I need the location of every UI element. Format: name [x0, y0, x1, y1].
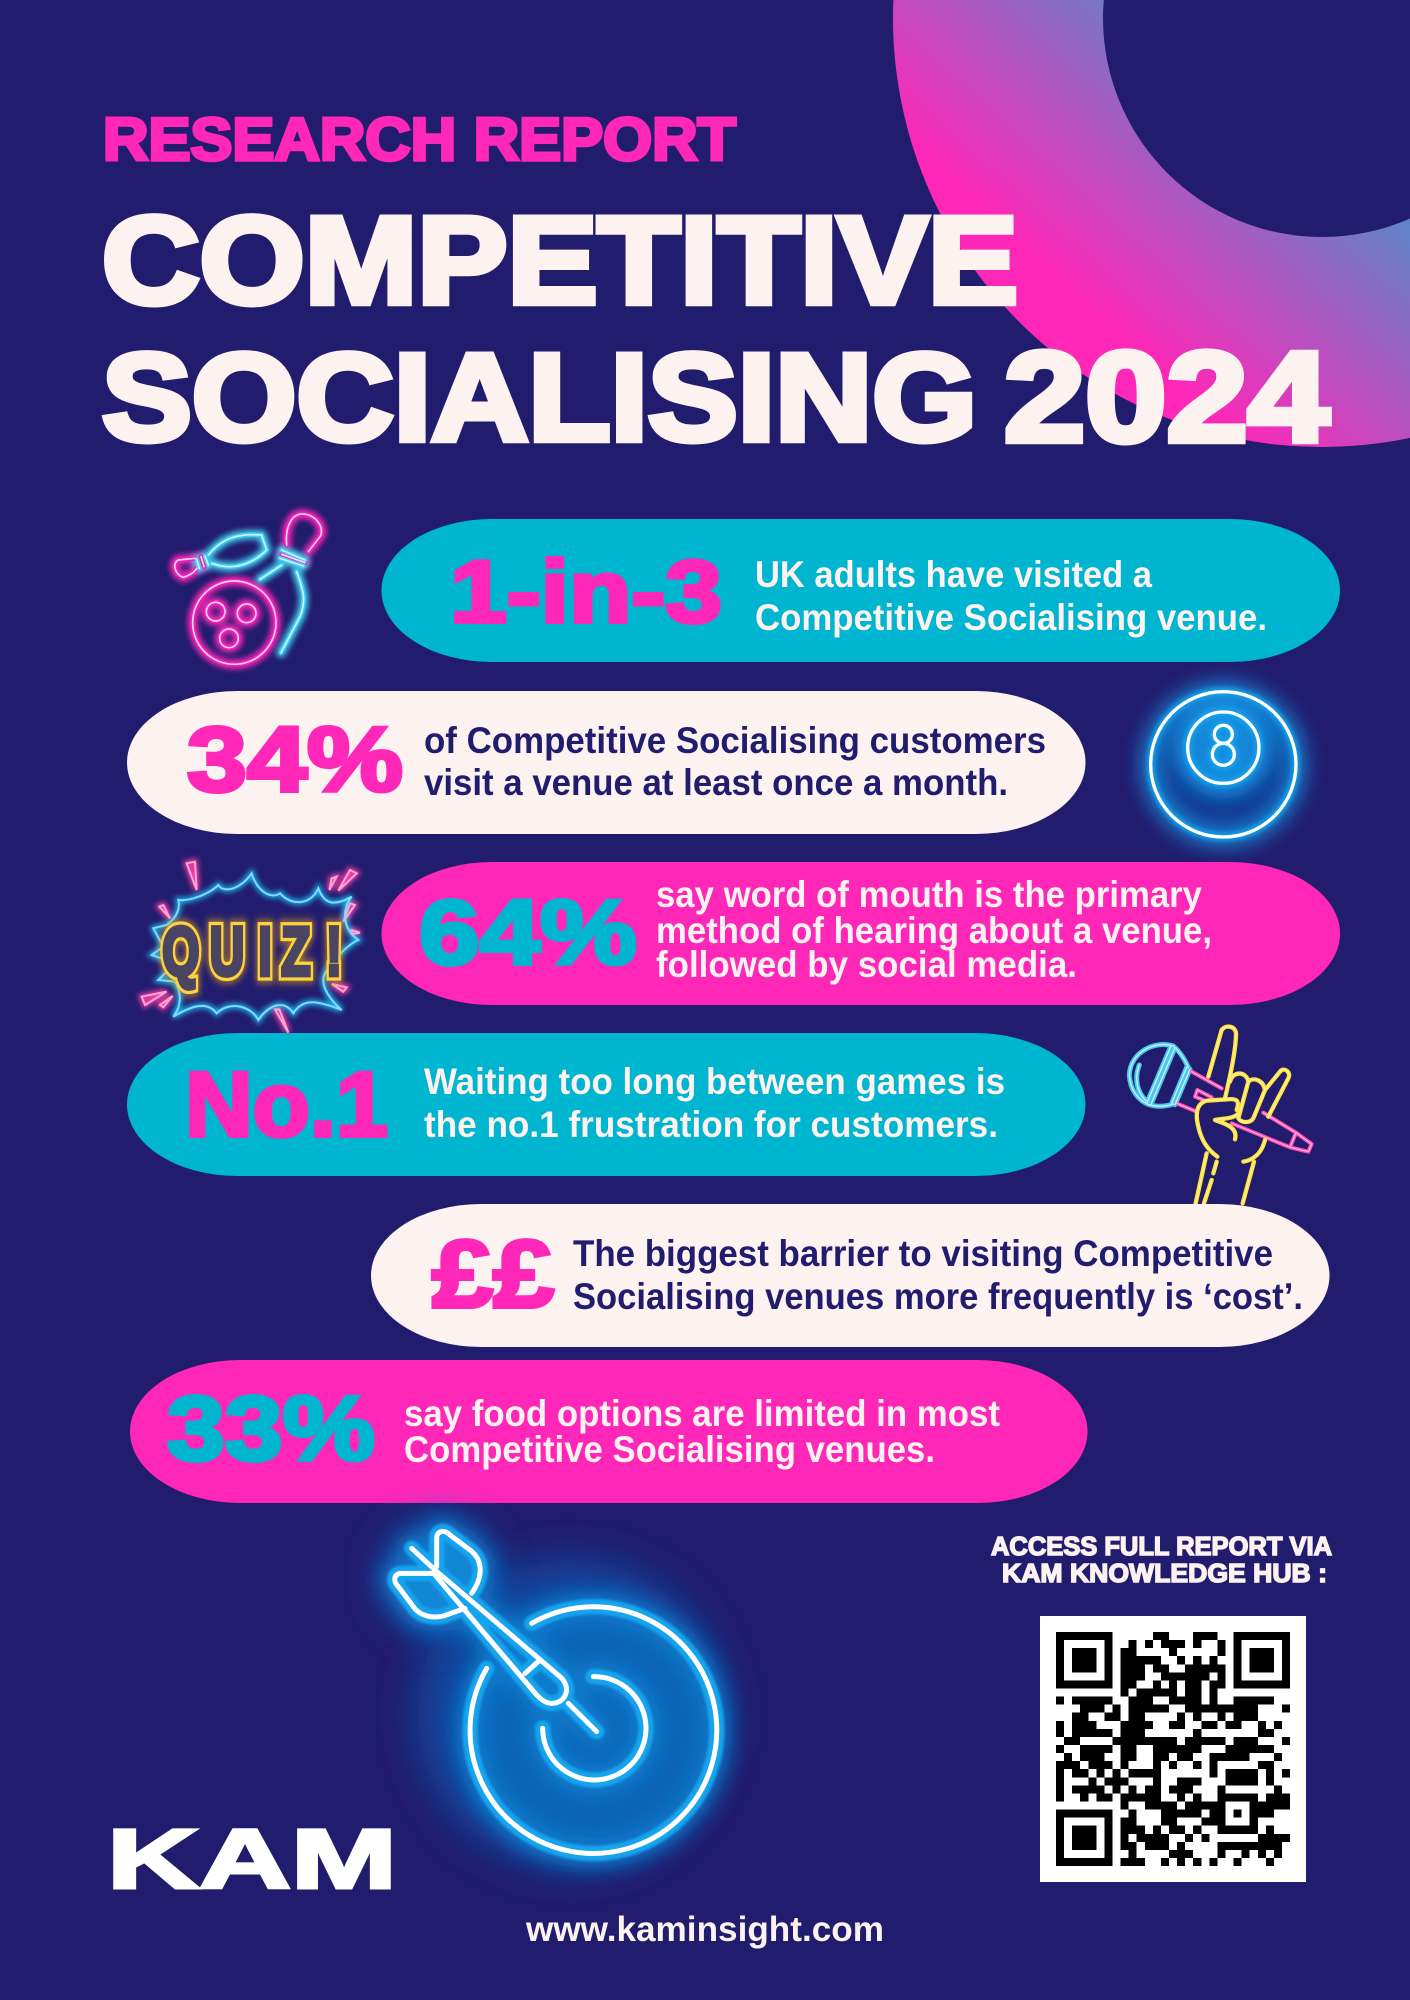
description: Competitive Socialising venue. — [755, 597, 1267, 638]
description: method of hearing about a venue, — [656, 910, 1212, 951]
KAM logo: KAM — [107, 1812, 397, 1906]
stat number: 33% — [167, 1378, 375, 1480]
pill background — [130, 1360, 1088, 1503]
description: Socialising venues more frequently is ‘cost’. — [573, 1276, 1303, 1317]
icon: quiz burst: QUIZ! — [162, 915, 342, 990]
description: followed by social media. — [656, 944, 1077, 985]
stat number: No.1 — [185, 1054, 388, 1156]
title: 2024 — [1004, 326, 1329, 469]
stat number: ££ — [432, 1221, 554, 1328]
icon: quiz burst: QUIZ! — [162, 915, 342, 990]
description — [755, 554, 1267, 638]
description: visit a venue at least once a month. — [424, 762, 1008, 803]
pill background — [382, 519, 1340, 662]
icon: bowling ball and pins — [175, 514, 321, 664]
description: say food options are limited in most — [404, 1393, 1000, 1434]
access label: KAM KNOWLEDGE HUB : — [1002, 1558, 1327, 1588]
stat number: 64% — [419, 882, 637, 984]
icon: neon dart and board — [383, 1520, 723, 1867]
website URL: www.kaminsight.com — [525, 1910, 884, 1949]
description: the no.1 frustration for customers. — [424, 1104, 998, 1145]
stat number: 1-in-3 — [450, 542, 722, 641]
title: COMPETITIVE — [102, 192, 1018, 330]
description — [404, 1393, 1000, 1470]
description — [573, 1233, 1303, 1317]
description — [424, 1061, 1005, 1145]
title — [102, 192, 1329, 469]
pill background — [127, 691, 1086, 834]
pill background — [371, 1204, 1330, 1347]
panel: 1-in-3 stat — [382, 519, 1340, 662]
panel: 34% stat — [127, 691, 1086, 834]
description — [424, 720, 1046, 803]
description: of Competitive Socialising customers — [424, 720, 1046, 761]
description: Waiting too long between games is — [424, 1061, 1005, 1102]
panel: cost stat — [371, 1204, 1330, 1347]
description: Competitive Socialising venues. — [404, 1429, 935, 1470]
access label — [991, 1531, 1332, 1588]
description: say word of mouth is the primary — [656, 874, 1202, 915]
decorative gradient ring — [893, 0, 1410, 447]
title: SOCIALISING — [102, 329, 977, 467]
panel: 33% stat — [130, 1360, 1088, 1503]
pill background — [127, 1033, 1086, 1176]
description: The biggest barrier to visiting Competitive — [573, 1233, 1273, 1274]
panel: No.1 stat — [127, 1033, 1086, 1176]
icon: microphone and rock hand — [1129, 1027, 1312, 1203]
icon: quiz burst: QUIZ! — [162, 915, 342, 990]
description: UK adults have visited a — [755, 554, 1152, 595]
panel: 64% stat — [382, 862, 1340, 1005]
icon: neon eight ball — [1151, 692, 1296, 837]
heading: research report: RESEARCH REPORT — [103, 106, 736, 173]
icon: quiz burst — [142, 862, 360, 1033]
stat number: 34% — [187, 709, 403, 811]
pill background — [382, 862, 1340, 1005]
access label: ACCESS FULL REPORT VIA — [991, 1531, 1332, 1561]
description — [656, 874, 1212, 985]
QR code — [1040, 1616, 1306, 1882]
